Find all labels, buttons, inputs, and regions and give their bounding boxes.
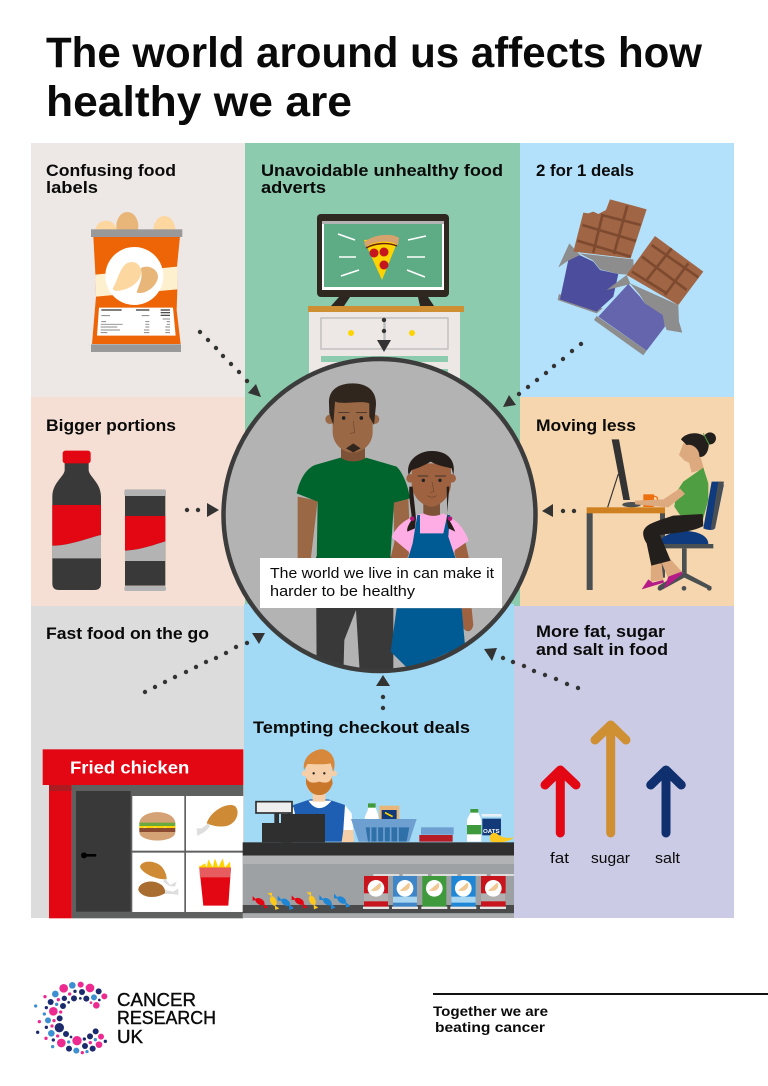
tagline [433, 993, 768, 1035]
icon: cabinet [308, 306, 464, 390]
arrow: checkout deals to centre [376, 675, 390, 710]
icon: burger [139, 812, 175, 840]
title: healthy we are [46, 78, 352, 126]
heading: 2 for 1 deals: 2 for 1 deals [536, 161, 634, 180]
arrow: salt: salt [655, 850, 681, 867]
arrow: salt [651, 770, 681, 867]
panel: fast food on the go [31, 606, 244, 918]
tagline: beating cancer [435, 1019, 546, 1035]
arrow: fast food to centre [143, 633, 265, 694]
logo wordmark: RESEARCH [117, 1007, 216, 1028]
heading: more fat, sugar and salt in food: and salt in food [536, 640, 668, 659]
icon: woman at desk [587, 432, 724, 591]
callout: the world we live in: harder to be healthy [270, 583, 416, 600]
heading: moving less: Moving less [536, 416, 636, 435]
panel: 2 for 1 deals [520, 143, 734, 397]
panel: confusing food labels [31, 143, 245, 397]
callout: the world we live in: The world we live in can make it [270, 565, 495, 582]
icon: chocolate bars [558, 199, 703, 355]
counter [243, 842, 515, 918]
icon: fries [198, 858, 231, 906]
panel: moving less [520, 397, 734, 606]
arrow: sugar: sugar [591, 850, 630, 867]
heading: more fat, sugar and salt in food: More fat, sugar [536, 622, 665, 641]
arrow: fat [545, 770, 576, 867]
logo wordmark [117, 989, 216, 1047]
logo mark: dots [34, 982, 107, 1054]
logo: Cancer Research UK [34, 982, 216, 1054]
icon: shopping basket and goods: OATS [483, 829, 500, 835]
heading: unavoidable unhealthy food adverts: Unavoidable unhealthy food [261, 161, 503, 180]
arrow: bigger portions to centre [185, 503, 219, 517]
girl [390, 451, 473, 677]
central circle with father and daughter [224, 359, 536, 677]
heading: confusing food labels: Confusing food [46, 161, 176, 180]
arrow: moving less to centre [542, 504, 576, 517]
heading: tempting checkout deals: Tempting checkout deals [253, 718, 470, 737]
icon: shopping basket and goods [351, 803, 514, 842]
arrow: adverts to centre [377, 318, 391, 352]
arrow: fat: fat [550, 850, 570, 867]
heading: more fat, sugar and salt in food [536, 622, 668, 659]
man [297, 383, 410, 677]
icon: checkout scene [243, 749, 515, 918]
panel: more fat, sugar and salt in food [514, 606, 734, 918]
icon: crisp packet [91, 212, 182, 352]
icon: crisp packets on shelf [363, 876, 506, 909]
arrow: confusing labels to centre [198, 330, 261, 397]
tagline: Together we are [433, 1003, 548, 1019]
icon: two chicken drumsticks [138, 862, 178, 897]
logo wordmark: CANCER [117, 989, 196, 1010]
icon: till [256, 802, 325, 842]
heading: unavoidable unhealthy food adverts [261, 161, 503, 197]
panel: unavoidable unhealthy food adverts [245, 143, 520, 607]
arrow: sugar [591, 725, 630, 867]
icon: fried chicken shop: Fried chicken [70, 757, 189, 777]
icon: large bottle [52, 451, 101, 590]
title: The world around us affects how [46, 29, 703, 77]
heading: fast food on the go: Fast food on the go [46, 624, 209, 643]
icon: television with pizza advert [317, 214, 449, 306]
icon: sweets [253, 892, 351, 910]
heading: confusing food labels [46, 161, 176, 197]
icon: fried chicken shop [43, 749, 243, 918]
arrow: fat sugar salt to centre [484, 648, 580, 690]
heading: confusing food labels: labels [46, 178, 98, 197]
panel: tempting checkout deals [243, 604, 515, 918]
callout: the world we live in [260, 558, 502, 608]
panel: bigger portions [31, 397, 245, 606]
icon: chicken drumstick [197, 805, 238, 836]
logo wordmark: UK [117, 1026, 144, 1047]
icon: cashier [287, 749, 354, 842]
arrow: 2 for 1 deals to centre [503, 342, 583, 407]
heading: unavoidable unhealthy food adverts: adverts [261, 178, 326, 197]
icon: small can [124, 489, 166, 591]
title [46, 29, 703, 126]
heading: bigger portions: Bigger portions [46, 416, 176, 435]
